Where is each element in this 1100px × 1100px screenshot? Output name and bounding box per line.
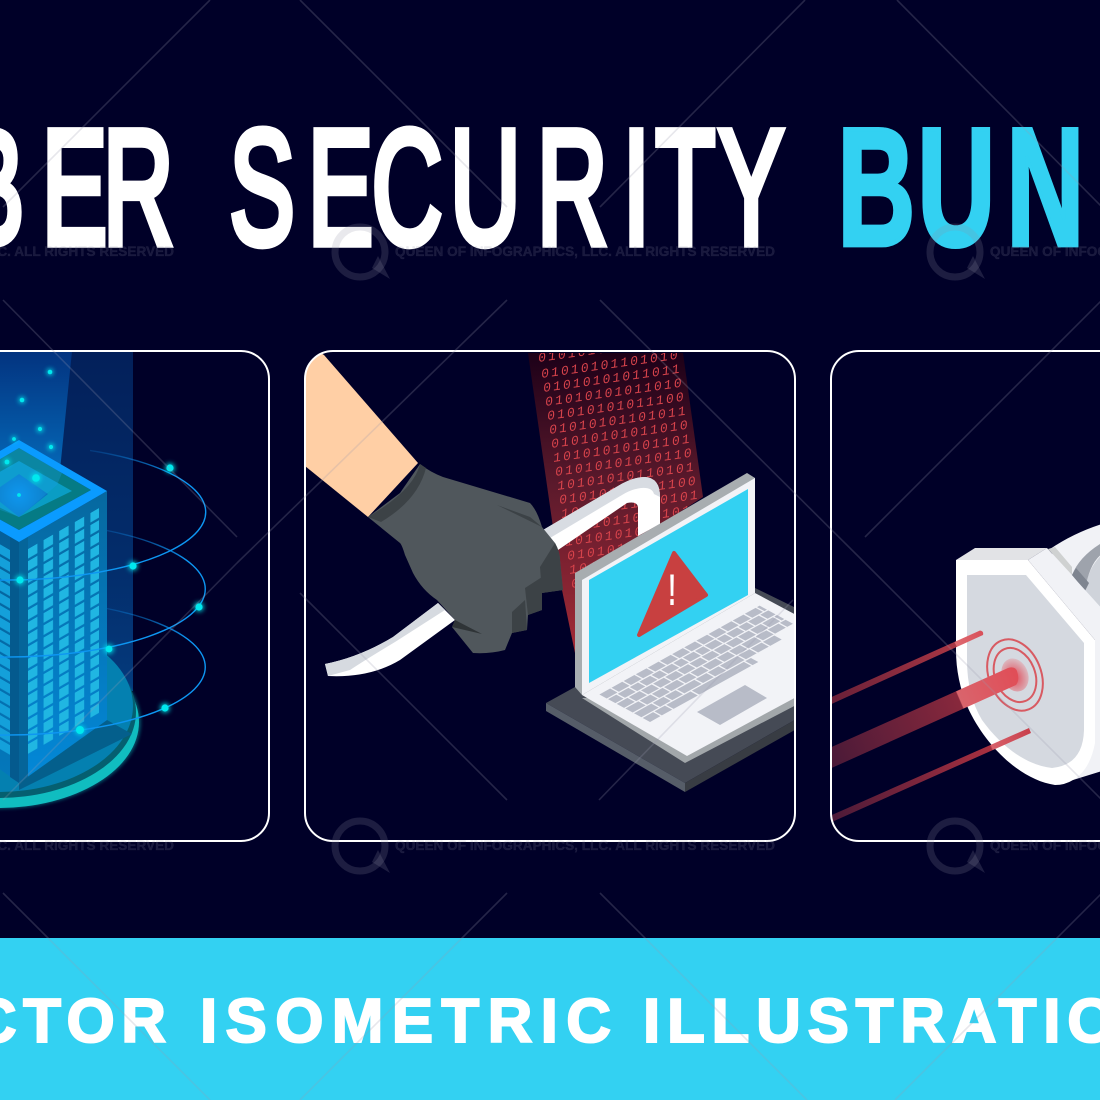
binary data stream: 01010101010101 (571, 557, 710, 592)
glowing nodes (4, 368, 204, 735)
building left face (0, 531, 17, 776)
watermark text: QUEEN OF INFOGRAPHICS, LLC. ALL RIGHTS RESERVED (395, 243, 775, 259)
trackpad (697, 685, 767, 725)
corner strips (10, 537, 28, 783)
light beam (0, 351, 133, 691)
binary data stream: 01010101011100 (559, 473, 698, 508)
title (0, 93, 1100, 281)
card outline 1 (0, 351, 269, 841)
warning triangle (639, 553, 706, 635)
bottom banner (0, 938, 1100, 1100)
screen lid (575, 473, 755, 695)
lock behind shield (1048, 524, 1100, 606)
arm (306, 354, 418, 517)
binary data stream: 01010101101011 (549, 403, 688, 438)
watermark text (0, 243, 1100, 853)
binary data stream: 10101010101101 (553, 431, 692, 466)
panel: hacker attack (300, 331, 807, 792)
crowbar upper (543, 477, 660, 550)
panel: smart building (0, 351, 206, 809)
binary data stream: 01010101011010 (551, 417, 690, 452)
subtitle (0, 987, 1100, 1056)
binary data stream: 01010101010101 (538, 331, 677, 366)
attack beams (825, 630, 1031, 825)
binary data stream: 10101011010101 (561, 487, 700, 522)
laptop keyboard deck (582, 593, 800, 763)
binary data stream: 01010101101010 (541, 347, 680, 382)
binary data stream: 01010101011100 (547, 389, 686, 424)
binary data stream: 01010101011011 (543, 361, 682, 396)
gloved hand (368, 464, 563, 653)
binary data stream (528, 353, 703, 653)
windows right (28, 508, 99, 756)
keyboard keys (603, 608, 807, 720)
binary data stream: 01010101010110 (555, 445, 694, 480)
binary data stream: 01010110111010 (563, 501, 702, 536)
watermark text: QUEEN OF INFOGRAPHICS, LLC. ALL RIGHTS RESERVED (395, 837, 775, 853)
binary data stream: 10101010110101 (557, 459, 696, 494)
card outline 2 (305, 351, 795, 841)
round platform (0, 656, 143, 811)
base plate (546, 588, 800, 792)
orbit rings (0, 450, 206, 735)
binary data stream: 01010101011010 (545, 375, 684, 410)
panel: shield (825, 523, 1100, 825)
subtitle: ISOMETRIC (200, 987, 611, 1056)
shield (956, 548, 1100, 785)
crowbar lower (325, 603, 455, 676)
warning triangle: ! (668, 566, 676, 615)
laptop (546, 473, 807, 792)
binary data stream: 10101010101010 (569, 543, 708, 578)
title: SECURITY (229, 97, 784, 279)
binary data stream: 10101010101101 (565, 515, 704, 550)
building right face (19, 491, 107, 783)
windows left (0, 544, 10, 755)
roof (0, 440, 107, 542)
binary data stream: 01010101010101 (567, 529, 706, 564)
watermark logos (335, 227, 985, 873)
target rings (986, 638, 1044, 712)
card outline 3 (831, 351, 1100, 841)
